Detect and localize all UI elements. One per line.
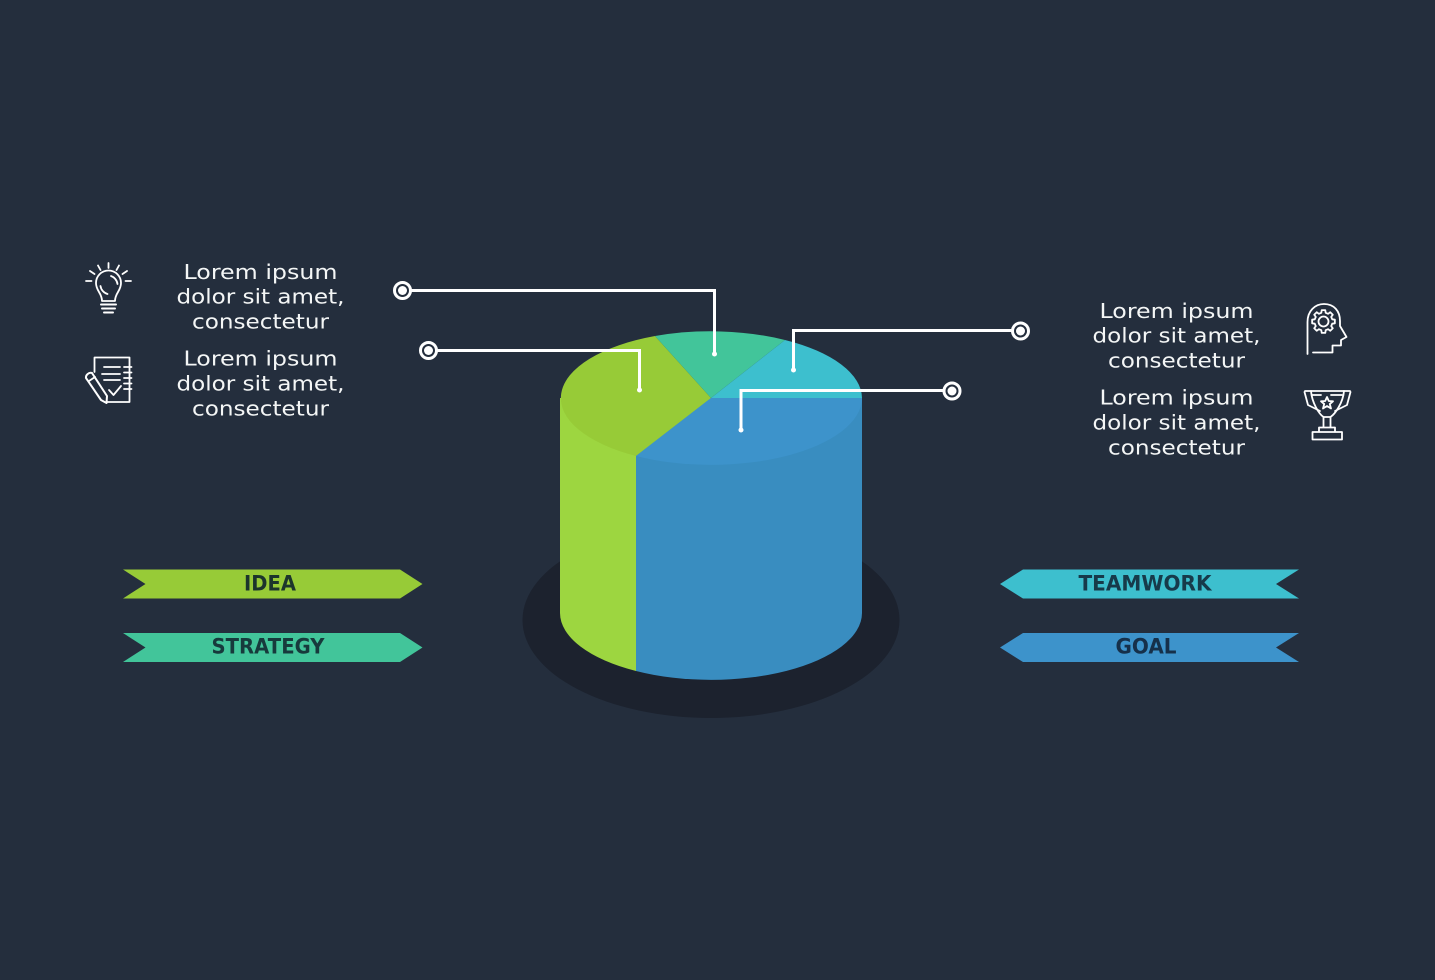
ribbon: goal [1000,633,1299,662]
text block: strategy: dolor sit amet, [176,372,344,396]
top segment: teamwork [711,340,862,398]
text block: teamwork: consectetur [1108,348,1246,372]
icon: light bulb [86,263,131,312]
text block: goal [1092,386,1260,460]
connector: idea [420,342,642,392]
cylinder side: blue [636,398,862,680]
text block: teamwork: dolor sit amet, [1092,324,1260,348]
text block: idea [176,260,344,334]
ribbon: idea [123,570,422,598]
text block: goal: consectetur [1108,436,1246,460]
ribbon: strategy: STRATEGY [212,634,325,660]
text block: strategy: Lorem ipsum [184,346,338,370]
cylinder shadow [522,522,900,718]
connector: strategy [394,282,717,356]
connector: goal [738,383,960,432]
text block: teamwork [1092,299,1260,372]
ribbon: teamwork [1000,570,1299,598]
text block: goal: dolor sit amet, [1092,410,1260,434]
icon: head with gear [1308,304,1346,354]
connector: teamwork [791,323,1028,372]
ribbon: teamwork: TEAMWORK [1078,572,1213,596]
ribbon: idea: IDEA [244,572,296,596]
text block: goal: Lorem ipsum [1100,386,1254,410]
top segment: goal [636,398,862,465]
cylinder side: green [560,398,636,671]
cylinder pie chart [560,331,862,680]
text block: idea: Lorem ipsum [184,260,338,284]
ribbon: strategy [123,633,422,662]
top segment: strategy [655,331,785,398]
text block: strategy [176,346,344,420]
ribbon: goal: GOAL [1116,634,1177,660]
icon: trophy [1304,391,1350,440]
text block: idea: consectetur [192,310,330,334]
icon: notepad and pen [86,358,132,403]
text block: teamwork: Lorem ipsum [1100,299,1254,323]
text block: idea: dolor sit amet, [176,284,344,308]
text block: strategy: consectetur [192,396,330,420]
top segment: idea [561,336,711,456]
